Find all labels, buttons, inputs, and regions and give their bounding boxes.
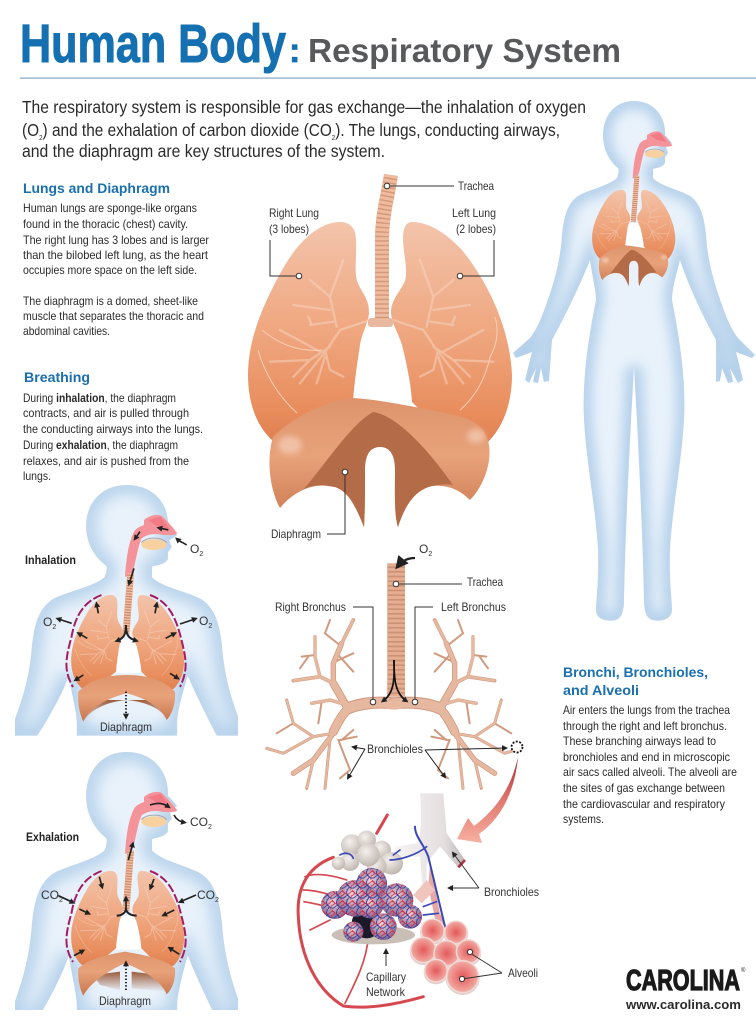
callouts: main lung labels: (3 lobes)	[269, 222, 309, 236]
bronchiole pipe	[393, 793, 465, 927]
exhalation labels: 2	[208, 824, 212, 831]
exhalation labels: CO	[197, 888, 215, 902]
inhalation labels: 2	[208, 623, 212, 630]
bronchi trachea	[383, 563, 405, 710]
panel: breathing text: Breathing	[24, 369, 90, 385]
panel: breathing text	[23, 369, 203, 483]
panel: bronchi text: the sites of gas exchange between	[563, 781, 725, 795]
intro text: 2	[332, 135, 335, 142]
panel: lungs and diaphragm text: than the bilobed left lung, as the heart	[23, 248, 209, 262]
callouts: main lung labels: Trachea	[458, 179, 494, 193]
panel: bronchi text: Bronchi, Bronchioles,	[563, 664, 708, 680]
bronchi callouts: Bronchioles	[367, 742, 423, 756]
bronchi callouts: Trachea	[467, 575, 503, 589]
intro text	[22, 97, 586, 161]
alveoli callouts: Capillary	[366, 970, 406, 984]
bronchi callouts	[275, 542, 522, 778]
inhalation labels: Inhalation	[25, 553, 76, 567]
alveoli and capillary illustration	[298, 793, 481, 1007]
full body figure with respiratory system	[513, 101, 755, 621]
intro text: and the diaphragm are key structures of the system.	[22, 141, 385, 161]
inhalation labels: Diaphragm	[100, 720, 152, 734]
main lungs and diaphragm illustration	[248, 175, 512, 527]
panel: breathing text: During inhalation, the diaphragm	[23, 391, 176, 405]
panel: breathing text: relaxes, and air is pushed from the	[23, 454, 189, 468]
panel: lungs and diaphragm text: found in the thoracic (chest) cavity.	[23, 217, 188, 231]
bronchi callouts: Left Bronchus	[441, 600, 506, 614]
panel: bronchi text: through the right and left bronchus.	[563, 719, 727, 733]
title	[20, 14, 621, 74]
inhalation labels	[25, 542, 212, 734]
panel: breathing text: the conducting airways into the lungs.	[23, 422, 203, 436]
panel: bronchi text: and Alveoli	[563, 682, 639, 698]
inhalation labels: 2	[52, 624, 56, 631]
panel: bronchi text: air sacs called alveoli. The alveoli are	[563, 765, 737, 779]
panel: bronchi text: Air enters the lungs from the trachea	[563, 703, 730, 717]
panel: bronchi text: the cardiovascular and respiratory	[563, 797, 725, 811]
panel: bronchi text: These branching airways lead to	[563, 734, 716, 748]
logo: Carolina: ®	[741, 967, 746, 974]
panel: lungs and diaphragm text: The right lung has 3 lobes and is larger	[23, 233, 209, 247]
logo: Carolina	[625, 965, 746, 1012]
panel: lungs and diaphragm text: abdominal cavities.	[23, 324, 110, 338]
inhalation labels: 2	[199, 551, 203, 558]
panel: bronchi text: systems.	[563, 812, 604, 826]
alveoli cutaway	[410, 919, 481, 995]
red vessels	[298, 815, 423, 1007]
airflow arrow	[383, 660, 406, 701]
big arrow to alveoli	[457, 757, 518, 843]
panel: bronchi text	[563, 664, 737, 826]
alveoli callouts	[366, 853, 539, 999]
exhalation labels: CO	[41, 888, 59, 902]
blue vessels	[340, 827, 445, 927]
panel: lungs and diaphragm text: occupies more space on the left side.	[23, 263, 197, 277]
capillary network cluster	[321, 868, 422, 944]
bronchus left branches	[267, 620, 394, 788]
inhalation arrows	[58, 528, 195, 717]
inhalation labels: O	[190, 542, 199, 556]
intro text: 2	[39, 135, 43, 142]
exhalation labels: Exhalation	[26, 830, 79, 844]
alveoli callouts: Alveoli	[508, 966, 538, 980]
intro text: ) and the exhalation of carbon dioxide (CO	[43, 120, 332, 140]
panel: breathing text: During exhalation, the diaphragm	[23, 438, 178, 452]
inhalation labels: O	[199, 614, 208, 628]
exhalation labels: 2	[59, 897, 63, 904]
bronchi callouts: O	[419, 542, 428, 556]
callouts: main lung labels: Diaphragm	[271, 527, 321, 541]
callouts: main lung labels: Left Lung	[452, 206, 496, 220]
exhalation labels	[26, 815, 219, 1008]
trachea	[368, 175, 393, 327]
exhalation labels: Diaphragm	[99, 994, 151, 1008]
callouts: main lung labels: (2 lobes)	[456, 222, 496, 236]
panel: lungs and diaphragm text: Human lungs are sponge-like organs	[23, 201, 197, 215]
exhalation figure	[7, 752, 246, 1020]
exhalation labels: CO	[190, 815, 208, 829]
title: Human Body	[20, 14, 286, 74]
inhalation figure	[7, 485, 246, 736]
panel: lungs and diaphragm text: muscle that separates the thoracic and	[23, 309, 204, 323]
bronchial tree	[267, 563, 521, 788]
grey alveolar sac	[332, 831, 403, 877]
title: :	[289, 32, 300, 70]
panel: lungs and diaphragm text	[23, 180, 209, 338]
exhalation arrows	[58, 803, 196, 990]
callouts: main lung labels: Right Lung	[269, 206, 319, 220]
panel: breathing text: contracts, and air is pulled through	[23, 406, 189, 420]
alveoli callouts: Bronchioles	[484, 885, 539, 899]
intro text: (O	[22, 120, 41, 140]
intro text: The respiratory system is responsible for gas exchange—the inhalation of oxygen	[22, 97, 586, 117]
panel: lungs and diaphragm text: The diaphragm is a domed, sheet-like	[23, 294, 198, 308]
intro text: ). The lungs, conducting airways,	[335, 120, 560, 140]
alveoli callouts: Network	[366, 985, 406, 999]
title: Respiratory System	[308, 32, 621, 69]
callouts: main lung labels	[269, 179, 496, 541]
panel: bronchi text: bronchioles and end in microscopic	[563, 750, 730, 764]
logo: Carolina: www.carolina.com	[625, 998, 741, 1012]
bronchi callouts: 2	[428, 551, 432, 558]
inhalation labels: O	[43, 615, 52, 629]
bronchi callouts: Right Bronchus	[275, 600, 346, 614]
panel: breathing text: lungs.	[23, 469, 51, 483]
exhalation labels: 2	[215, 897, 219, 904]
panel: lungs and diaphragm text: Lungs and Diaphragm	[23, 180, 170, 196]
